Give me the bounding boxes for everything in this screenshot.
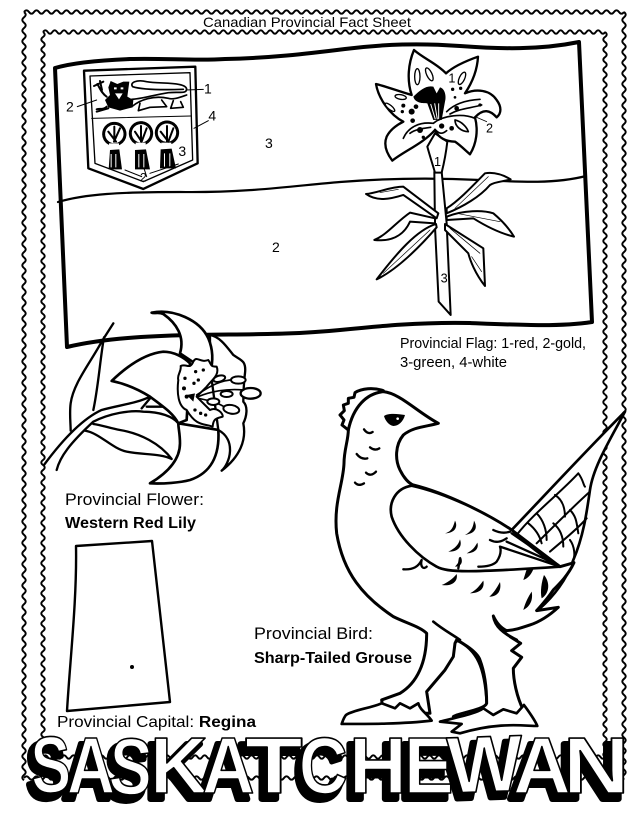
flag lily numbers: 3: [441, 272, 448, 286]
lion: [94, 81, 187, 112]
text: flag legend: 3-green, 4-white: [400, 355, 507, 371]
icon: western red lily: [44, 312, 261, 483]
flag lily leaves: [366, 173, 514, 286]
title: fact sheet: Canadian Provincial Fact Sheet: [203, 14, 411, 30]
heading shadow: N: [558, 728, 624, 815]
text: provincial flower: Provincial Flower:: [65, 491, 204, 509]
heading shadow: [24, 724, 624, 815]
flag outline: [55, 42, 592, 347]
heading shadow: A: [62, 726, 110, 815]
grouse wing feathers: [403, 530, 560, 569]
flag lily petals: [376, 50, 500, 161]
grouse feet: [342, 703, 537, 733]
heading: SASKATCHEWAN: [24, 718, 629, 815]
text: provincial bird: Sharp-Tailed Grouse: [254, 650, 412, 667]
heading shadow: T: [240, 727, 298, 815]
heading letters: A: [513, 721, 571, 810]
heading letters: S: [29, 719, 72, 810]
grouse eye: [384, 414, 405, 426]
text: flag legend: Provincial Flag: 1-red, 2-gold,: [400, 336, 586, 352]
grouse leg line: [433, 622, 487, 703]
heading shadow: K: [145, 727, 203, 815]
heading shadow: A: [197, 728, 250, 815]
grouse wing: [391, 486, 560, 571]
text: provincial capital: Provincial Capital: Regina: [57, 714, 256, 731]
lily throat: [178, 359, 261, 427]
text: flag legend: [400, 336, 586, 371]
heading letters: C: [299, 720, 348, 810]
lily lower petals: [112, 352, 218, 483]
flag lily numbers: [434, 72, 493, 286]
heading shadow: E: [399, 728, 449, 815]
stem: [434, 172, 451, 315]
shield callout numbers: [66, 80, 216, 185]
flag colour numbers: [265, 135, 280, 255]
icon: province map: [67, 541, 170, 711]
heading shadow: A: [508, 727, 566, 815]
lily leaf and stems: [44, 323, 178, 470]
heading shadow: H: [344, 727, 402, 815]
lily back petal: [210, 335, 246, 471]
flag dividing line: [58, 176, 586, 202]
text: provincial bird: Provincial Bird:: [254, 624, 373, 643]
shield chief divider: [92, 116, 191, 118]
grouse tail: [512, 412, 625, 608]
heading letters: [29, 718, 629, 813]
shield callout numbers: 1: [204, 80, 212, 96]
heading shadow: C: [294, 726, 343, 815]
shield callout numbers: 2: [66, 99, 74, 115]
shield outline: [84, 67, 198, 189]
heading shadow: W: [440, 724, 520, 815]
flag lily numbers: 2: [486, 122, 493, 136]
panel: provincial flag: [55, 42, 592, 347]
text: provincial bird: [254, 624, 412, 667]
flag lily numbers: 1: [434, 155, 441, 169]
shield callout numbers: 4: [208, 108, 216, 124]
shield callout numbers: 2: [140, 171, 147, 185]
flag lily numbers: 1: [448, 72, 455, 86]
grouse crest: [340, 389, 383, 430]
icon: coat of arms shield: [66, 67, 216, 189]
lily top petal: [152, 312, 212, 373]
grouse feather marks: [442, 521, 548, 610]
wheat sheaves: [104, 122, 178, 169]
flag colour numbers: 3: [265, 135, 273, 151]
heading letters: A: [67, 720, 115, 810]
heading letters: N: [563, 722, 629, 811]
shield callout numbers: 3: [178, 143, 186, 159]
icon: flag lily: [366, 50, 514, 315]
heading letters: W: [445, 718, 525, 810]
icon: sharp-tailed grouse: [336, 389, 625, 733]
flag colour numbers: 2: [272, 239, 280, 255]
heading letters: T: [245, 721, 303, 810]
grouse body: [336, 392, 574, 717]
capital marker: Regina: [130, 665, 134, 669]
heading letters: H: [349, 721, 407, 810]
heading letters: A: [202, 722, 255, 811]
flag lily stamens and spots: [384, 67, 482, 139]
text: provincial flower: Western Red Lily: [65, 515, 196, 532]
heading letters: S: [107, 721, 154, 813]
heading shadow: S: [24, 725, 67, 815]
shield inner outline: [90, 73, 193, 182]
grouse tail feather bars: [517, 473, 590, 582]
calyx: [427, 133, 447, 173]
heading letters: E: [404, 722, 454, 811]
heading letters: K: [150, 721, 208, 810]
text: provincial flower: [65, 491, 204, 532]
